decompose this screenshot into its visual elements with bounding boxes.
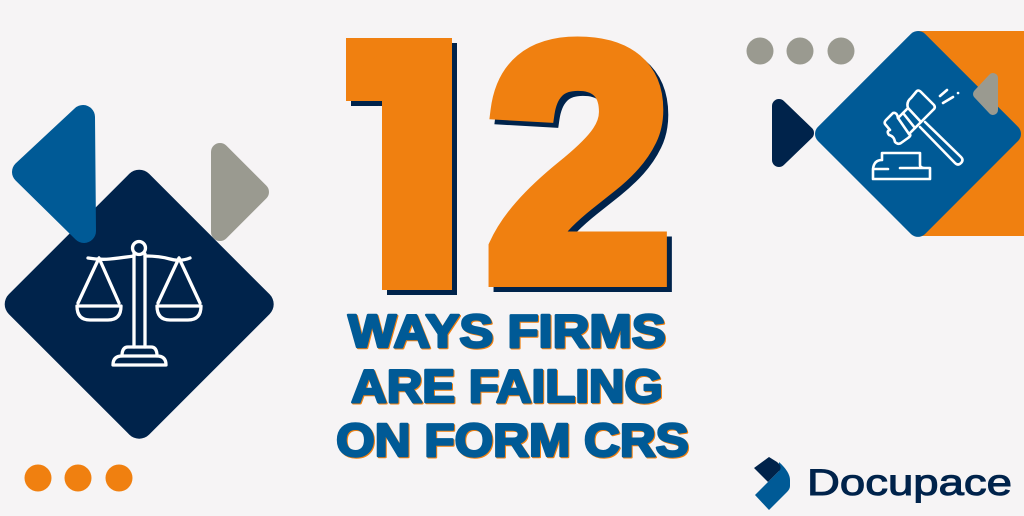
icon: gavel — [873, 90, 962, 179]
navy diamond — [0, 164, 279, 444]
blue diamond — [811, 27, 1024, 241]
blue rounded triangle — [24, 117, 84, 231]
navy rounded triangle — [779, 106, 807, 160]
subtitle — [336, 305, 690, 467]
subtitle main: ON FORM CRS — [336, 414, 689, 466]
gray rounded triangle — [220, 152, 260, 232]
subtitle shadow: ARE FAILING — [352, 361, 664, 413]
icon: scales — [77, 242, 201, 365]
panel: gavel graphic — [779, 27, 1024, 241]
number shadow — [351, 43, 672, 295]
panel: scales of justice graphic — [0, 117, 279, 444]
subtitle main: ARE FAILING — [351, 360, 663, 412]
logo wordmark: Docupace — [807, 462, 1012, 503]
orange block — [918, 31, 1024, 236]
number main — [346, 36, 667, 290]
logo mark — [754, 457, 790, 510]
subtitle shadow: ON FORM CRS — [337, 415, 690, 467]
subtitle shadow — [337, 306, 690, 467]
gray dots — [746, 38, 854, 64]
subtitle main: WAYS FIRMS — [348, 305, 666, 357]
subtitle shadow: WAYS FIRMS — [349, 306, 667, 358]
title number 12 — [346, 36, 672, 295]
subtitle main — [336, 305, 689, 466]
gray rounded triangle — [978, 78, 993, 110]
orange dots — [24, 464, 132, 492]
logo: Docupace — [754, 457, 1012, 510]
